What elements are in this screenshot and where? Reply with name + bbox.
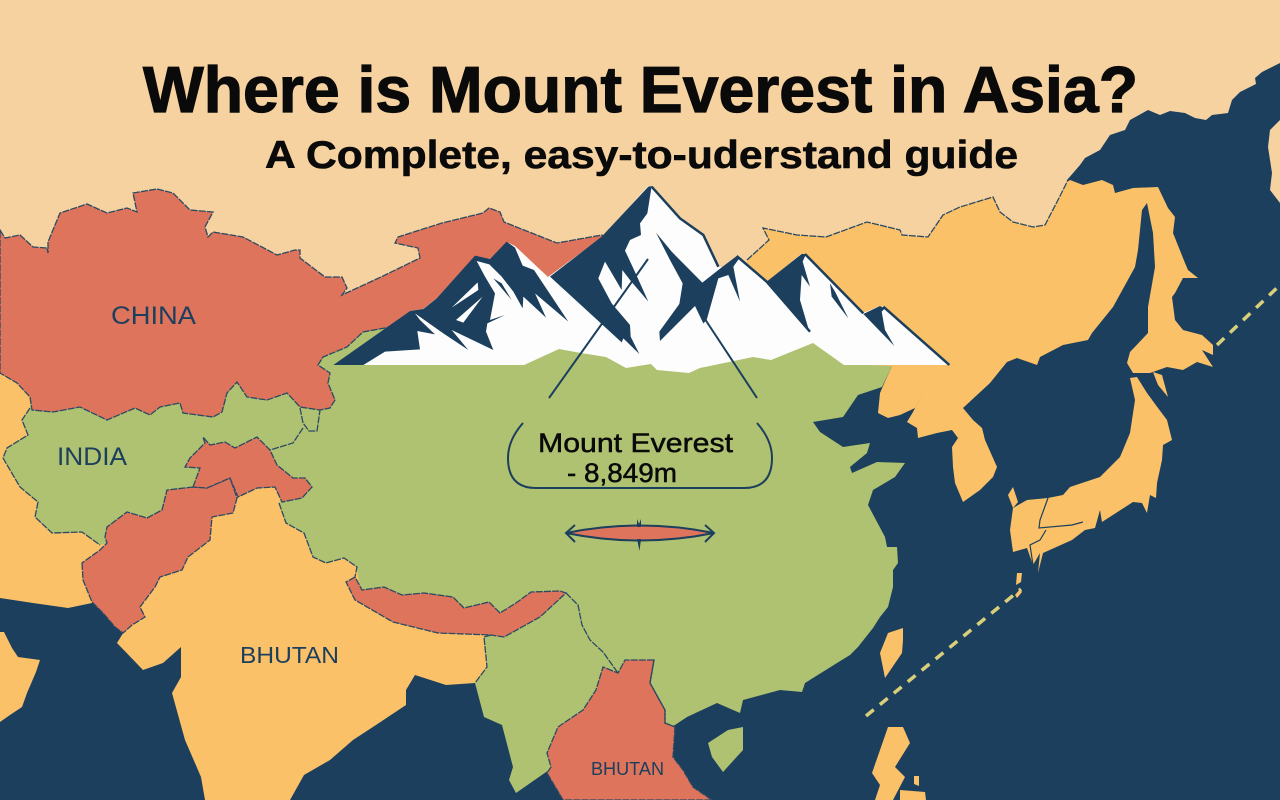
land: Philippines bbox=[872, 727, 926, 800]
land: red Himalayan strip bbox=[346, 577, 566, 637]
label: Bhutan south: BHUTAN bbox=[591, 759, 664, 779]
label: Bhutan central: BHUTAN bbox=[240, 642, 339, 668]
land: main green region bbox=[3, 310, 905, 793]
illustration: Himalayan mountain range bbox=[333, 186, 949, 373]
land: Japan main islands bbox=[1008, 377, 1172, 598]
dotted maritime route line bbox=[866, 285, 1280, 716]
callout name: Mount Everest bbox=[538, 428, 734, 458]
icon: scale marker with arrows bbox=[566, 519, 714, 551]
land: far-west orange region bbox=[0, 365, 120, 608]
land: red northern patch bbox=[185, 437, 312, 502]
callout: Mount Everest height bbox=[508, 423, 772, 488]
snow silhouette bbox=[334, 186, 949, 373]
land: red south-east region bbox=[547, 660, 712, 800]
land: beige island top right bbox=[1268, 120, 1280, 203]
subtitle: A Complete, easy-to-uderstand guide bbox=[265, 134, 1018, 177]
land: Hainan bbox=[708, 727, 743, 772]
land: northern beige region bbox=[0, 0, 1280, 400]
land: Taiwan bbox=[880, 628, 903, 678]
left peaks shadow with snow notches bbox=[333, 242, 568, 365]
land: India-shaped orange subcontinent bbox=[115, 470, 500, 800]
callout frame bbox=[508, 423, 772, 488]
dashed country borders bbox=[3, 182, 1067, 727]
label: India: INDIA bbox=[57, 443, 127, 471]
leader lines from mountain to callout bbox=[549, 259, 757, 398]
land: small island north of Japan bbox=[1153, 372, 1168, 397]
land: north-west red region labelled China bbox=[0, 189, 640, 420]
callout height: - 8,849m bbox=[567, 458, 677, 488]
label: China: CHINA bbox=[111, 302, 196, 330]
land: north-east orange region bbox=[747, 180, 1213, 502]
right peaks shadows bbox=[737, 254, 949, 365]
land: small orange peninsula lower left bbox=[0, 632, 40, 722]
land: red region west of the subcontinent bbox=[82, 478, 237, 633]
central peak and ridge shadows bbox=[550, 186, 740, 354]
title: Where is Mount Everest in Asia? bbox=[143, 53, 1138, 126]
